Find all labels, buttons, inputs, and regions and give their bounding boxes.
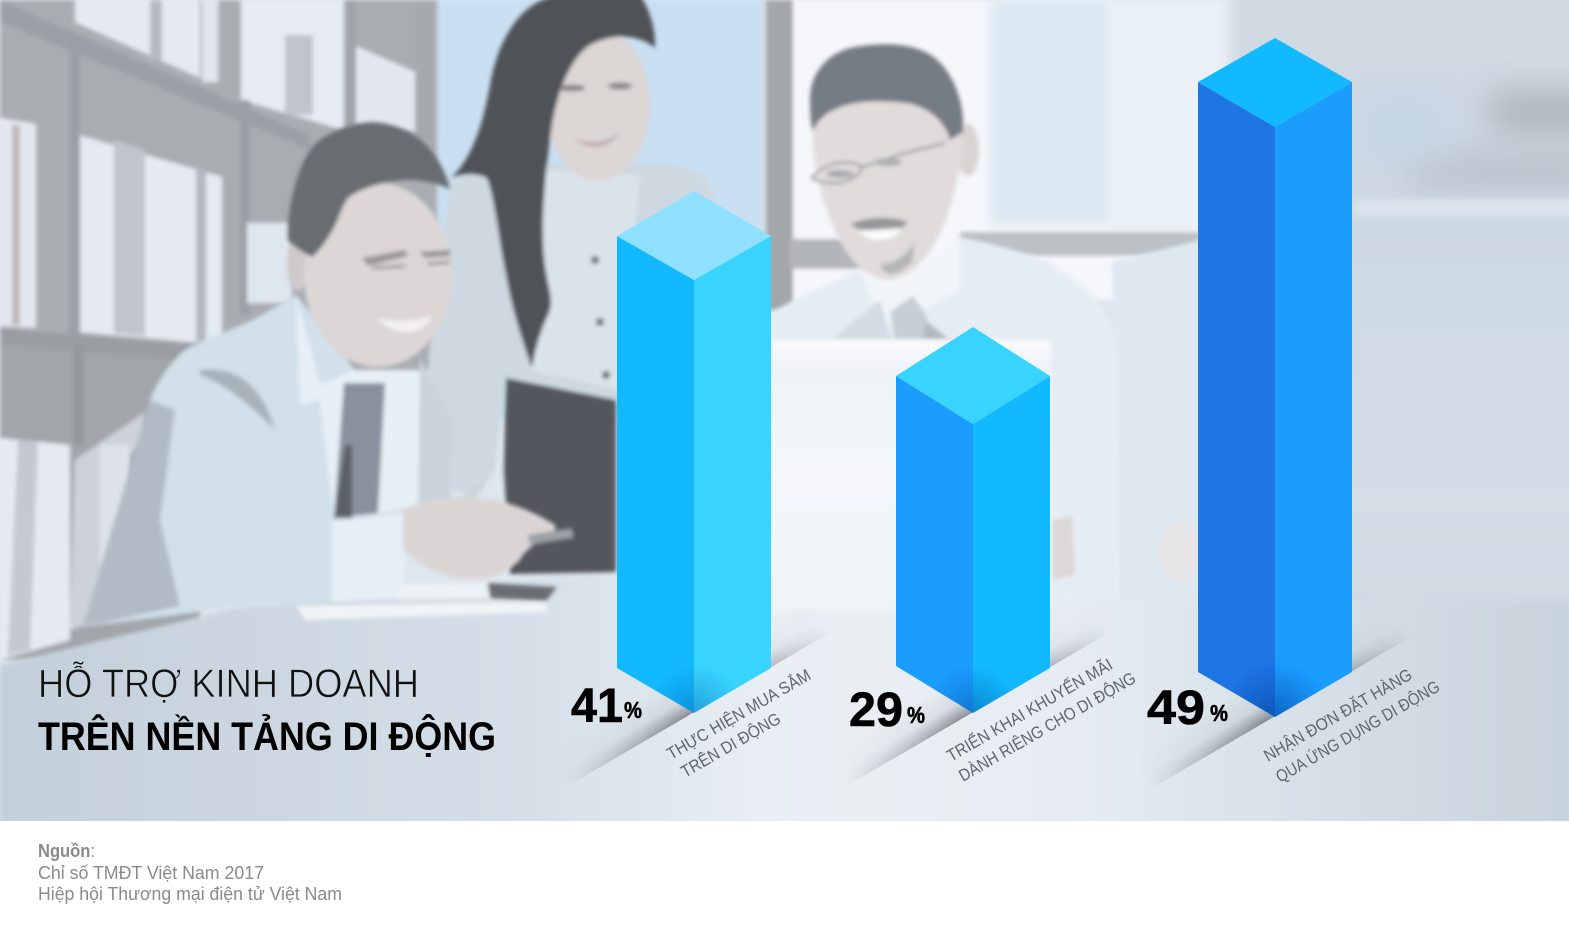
value: 41%: 41 xyxy=(571,680,623,733)
title: TRÊN NỀN TẢNG DI ĐỘNG xyxy=(38,713,496,759)
table surface xyxy=(0,599,1565,821)
man pointing with pen xyxy=(83,122,574,627)
value: 49%: 49 xyxy=(1147,682,1205,735)
bar 2: 29% xyxy=(896,327,1050,713)
value: 49%: % xyxy=(1210,700,1228,726)
label: bar 3: NHẬN ĐƠN ĐẶT HÀNG xyxy=(1260,665,1415,765)
label: bar 2: TRIỂN KHAI KHUYẾN MÃI xyxy=(944,655,1116,765)
bar 1: 41% xyxy=(617,191,771,713)
label: bar 2: DÀNH RIÊNG CHO DI ĐỘNG xyxy=(956,669,1139,785)
value: 29%: 29 xyxy=(849,684,903,737)
laptop xyxy=(771,340,1051,610)
window and blurred right side xyxy=(435,0,1569,860)
label: bar 1: TRÊN DI ĐỘNG xyxy=(678,709,784,781)
source note xyxy=(38,841,342,904)
bookshelf xyxy=(0,0,437,660)
label: bar 3: QUA ỨNG DỤNG DI ĐỘNG xyxy=(1272,677,1443,786)
ground shadow: bar 1 xyxy=(578,633,822,780)
ground shadow: bar 2 xyxy=(856,633,1101,780)
title: HỖ TRỢ KINH DOANH xyxy=(38,660,419,706)
woman xyxy=(420,0,720,574)
source note: Hiệp hội Thương mại điện tử Việt Nam xyxy=(38,884,342,904)
ground shadow: bar 3 xyxy=(1159,638,1402,784)
source note: Nguồn: xyxy=(38,841,95,861)
value: 41%: % xyxy=(624,697,642,723)
value: 49% xyxy=(1147,682,1228,735)
label: bar 1: THỰC HIỆN MUA SẮM xyxy=(664,666,814,763)
value: 29%: % xyxy=(907,702,925,728)
bar 3: 49% xyxy=(1198,38,1352,717)
person far right: shirt and hand xyxy=(1111,239,1198,580)
man with glasses xyxy=(770,44,1120,610)
title xyxy=(38,660,496,759)
source note: Chỉ số TMĐT Việt Nam 2017 xyxy=(38,863,264,883)
